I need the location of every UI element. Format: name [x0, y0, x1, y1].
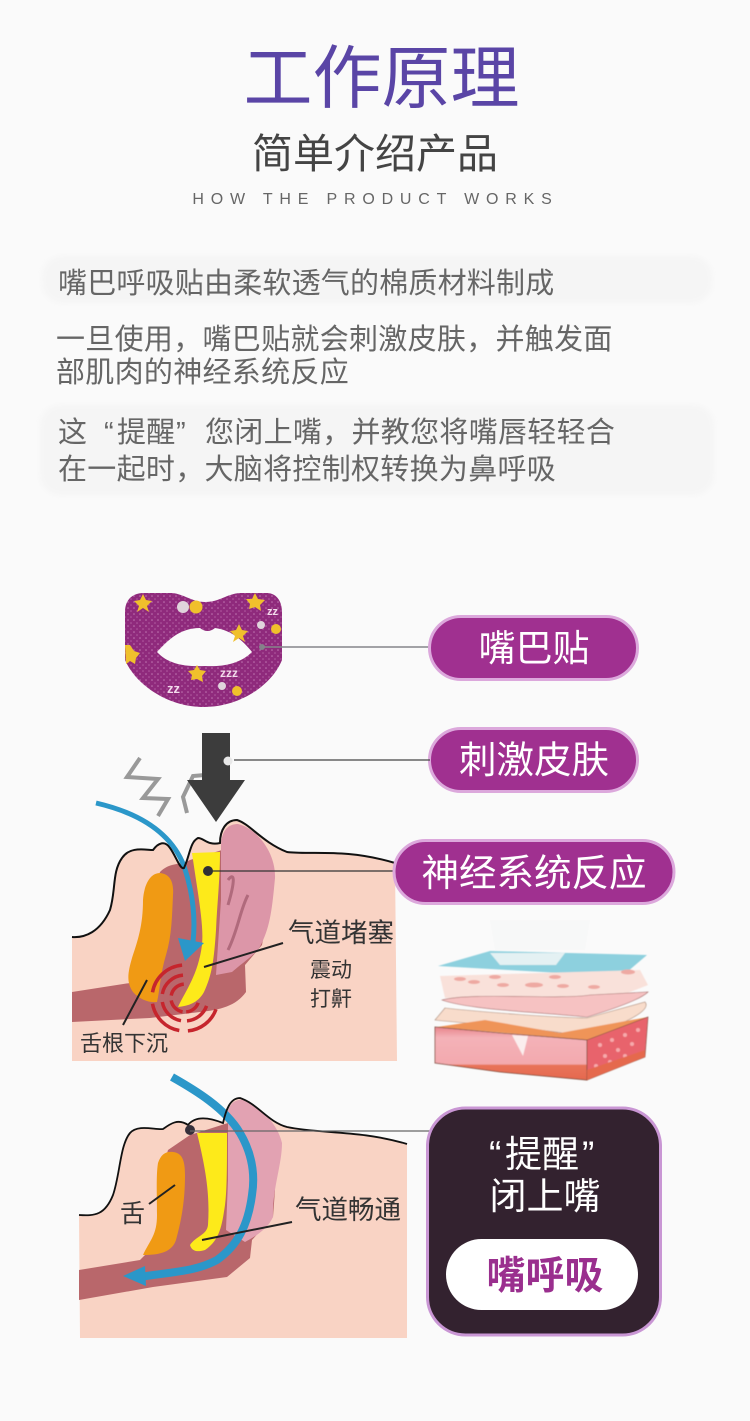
pill: mouth breathing	[446, 1239, 638, 1310]
pill: mouth breathing: 嘴呼吸	[486, 1255, 604, 1298]
reminder card: 提醒	[505, 1134, 579, 1175]
label: airway clear: 气道畅通	[295, 1195, 401, 1225]
mouth patch illustration	[125, 593, 282, 707]
text block: reminder: “	[104, 417, 114, 449]
label: airway blocked: 气道堵塞	[288, 918, 394, 948]
leader lines	[149, 1185, 292, 1240]
snoring zigzag marks	[127, 758, 205, 816]
label pill: mouth patch: 嘴巴贴	[478, 628, 590, 669]
text block: reminder	[40, 405, 714, 495]
reminder card	[428, 1108, 660, 1335]
reminder card: ”	[582, 1134, 594, 1175]
label pill: nervous system	[394, 840, 674, 904]
side face speckles	[594, 1028, 640, 1068]
connector: lips to reminder card	[185, 1125, 430, 1135]
cream layer	[435, 1002, 646, 1037]
label pill: stimulate skin	[430, 728, 638, 792]
label: tongue: 舌	[120, 1200, 145, 1228]
text block: reminder: ”	[176, 417, 186, 449]
connector: patch to label	[259, 644, 430, 650]
translucent film	[490, 920, 590, 950]
reminder card: “	[489, 1134, 501, 1175]
throat	[79, 1123, 275, 1300]
text block: reminder: 提醒	[117, 416, 176, 449]
soft palate yellow	[178, 852, 220, 1007]
label pill: stimulate skin: 刺激皮肤	[459, 739, 609, 781]
head outline	[79, 1098, 407, 1215]
connector: arrow to label	[224, 756, 430, 766]
label pill: mouth patch	[430, 616, 638, 680]
leader lines	[123, 943, 283, 1025]
head outline	[72, 820, 395, 937]
skin	[72, 820, 397, 1061]
english subtitle: HOW THE PRODUCT WORKS	[192, 191, 559, 208]
subtitle: 简单介绍产品	[252, 131, 498, 177]
head diagram: clear airway	[79, 1077, 407, 1338]
head diagram: blocked airway	[72, 803, 397, 1061]
reminder card: 闭上嘴	[490, 1176, 600, 1217]
side face	[587, 1017, 648, 1080]
soft palate yellow	[190, 1133, 227, 1251]
vibration arcs	[152, 965, 216, 1031]
text block: reminder: 您闭上嘴，并教您将嘴唇轻轻合	[205, 416, 615, 449]
connector: head to nerve label	[203, 866, 394, 876]
text block: stimulation: 一旦使用，嘴巴贴就会刺激皮肤，并触发面	[56, 323, 613, 356]
label: snoring: 打鼾	[310, 988, 352, 1011]
text block: stimulation	[56, 323, 613, 389]
nasal cavity	[226, 1100, 282, 1242]
orange top	[437, 1017, 648, 1040]
patch zzz marks: zz	[167, 681, 180, 696]
front face	[435, 1027, 587, 1080]
title: 工作原理	[244, 40, 520, 117]
label: vibration: 震动	[310, 959, 352, 982]
skin layers illustration	[435, 920, 648, 1080]
tongue	[128, 873, 173, 1002]
arrow: pressing down	[187, 733, 245, 822]
text block: reminder: 在一起时，大脑将控制权转换为鼻呼吸	[58, 453, 556, 486]
skin	[79, 1098, 407, 1338]
patch zzz marks: zzz	[220, 666, 238, 680]
nasal cavity	[216, 824, 275, 975]
label pill: nervous system: 神经系统反应	[422, 852, 646, 894]
patch zzz marks: zz	[267, 606, 278, 618]
speckled layer	[440, 970, 648, 1000]
tongue	[143, 1152, 185, 1255]
airflow arrow	[96, 803, 204, 961]
text block: reminder: 这	[58, 416, 87, 449]
patch zzz marks	[167, 606, 278, 696]
nasal folds	[228, 877, 248, 950]
text block: stimulation: 部肌肉的神经系统反应	[56, 356, 349, 389]
pink layer	[442, 992, 648, 1017]
label: tongue root sinks: 舌根下沉	[80, 1031, 168, 1056]
throat	[72, 850, 270, 1022]
blue layer	[438, 951, 647, 973]
text block: material: 嘴巴呼吸贴由柔软透气的棉质材料制成	[58, 267, 554, 300]
airflow arrow	[123, 1077, 253, 1286]
text block: material	[42, 256, 712, 303]
